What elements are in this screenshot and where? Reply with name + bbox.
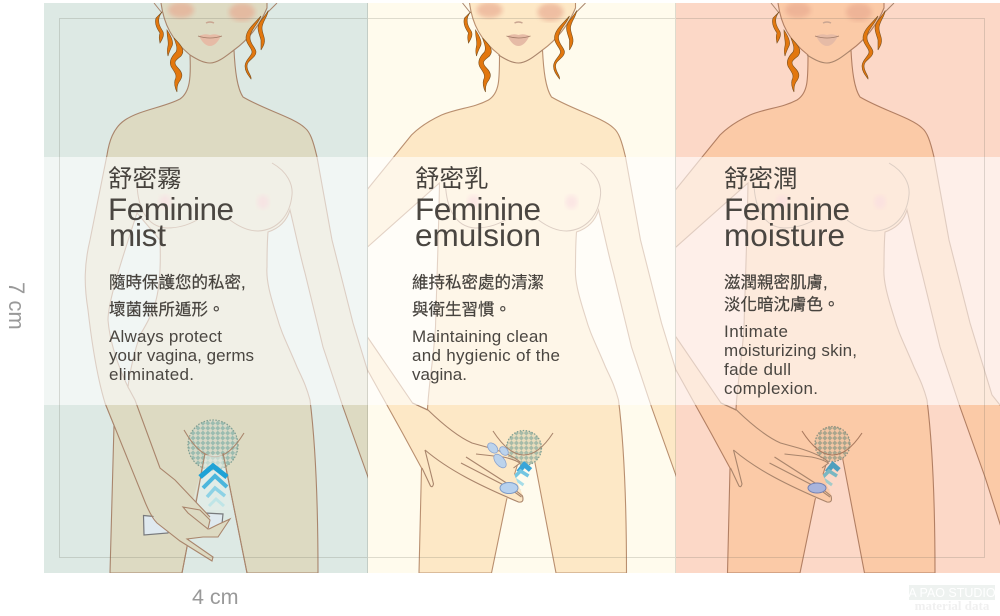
dimension label: height: 7 cm (4, 282, 29, 330)
text block: feminine emulsion: 維持私密處的清潔 (412, 273, 544, 292)
text block: feminine moisture: complexion. (724, 379, 818, 398)
watermark: material data (915, 598, 990, 613)
text block: feminine emulsion: Feminine (415, 191, 541, 227)
text block: feminine moisture (724, 165, 857, 398)
text block: feminine moisture: 滋潤親密肌膚, (724, 273, 828, 292)
panel: feminine emulsion (368, 3, 676, 573)
text block: feminine emulsion (412, 165, 560, 384)
text block: feminine moisture: moisture (724, 217, 845, 253)
text block: feminine mist: mist (109, 217, 166, 253)
panel: feminine mist (44, 0, 395, 573)
figure: woman applying moisture (647, 0, 1000, 573)
text block: feminine mist: 壞菌無所遁形。 (109, 300, 224, 319)
text block: feminine mist: eliminated. (109, 365, 194, 384)
text block: feminine mist: Feminine (108, 191, 234, 227)
watermark (908, 585, 996, 613)
text block: feminine emulsion: 與衛生習慣。 (412, 300, 511, 319)
text block: feminine moisture: moisturizing skin, (724, 341, 857, 360)
text block: feminine mist: 舒密霧 (108, 165, 182, 193)
text block: feminine moisture: Feminine (724, 191, 850, 227)
text block: feminine mist: Always protect (109, 327, 222, 346)
text block: feminine moisture: 淡化暗沈膚色。 (724, 295, 840, 314)
dimension label: width: 4 cm (192, 585, 239, 609)
text block: feminine emulsion: vagina. (412, 365, 467, 384)
panel: feminine moisture (647, 0, 1000, 573)
translucent text band (44, 157, 1000, 405)
text block: feminine emulsion: Maintaining clean (412, 327, 548, 346)
figure: woman with mist spray (85, 0, 395, 573)
text block: feminine moisture: Intimate (724, 322, 788, 341)
figure: woman applying emulsion (368, 3, 676, 573)
watermark: A PAO STUDIO (908, 586, 996, 600)
text block: feminine mist (108, 165, 254, 384)
text block: feminine moisture: fade dull (724, 360, 791, 379)
text block: feminine emulsion: and hygienic of the (412, 346, 560, 365)
text block: feminine mist: 隨時保護您的私密, (109, 273, 246, 292)
text block: feminine mist: your vagina, germs (109, 346, 254, 365)
text block: feminine emulsion: 舒密乳 (415, 165, 488, 193)
text block: feminine emulsion: emulsion (415, 217, 541, 253)
text block: feminine moisture: 舒密潤 (724, 165, 798, 193)
